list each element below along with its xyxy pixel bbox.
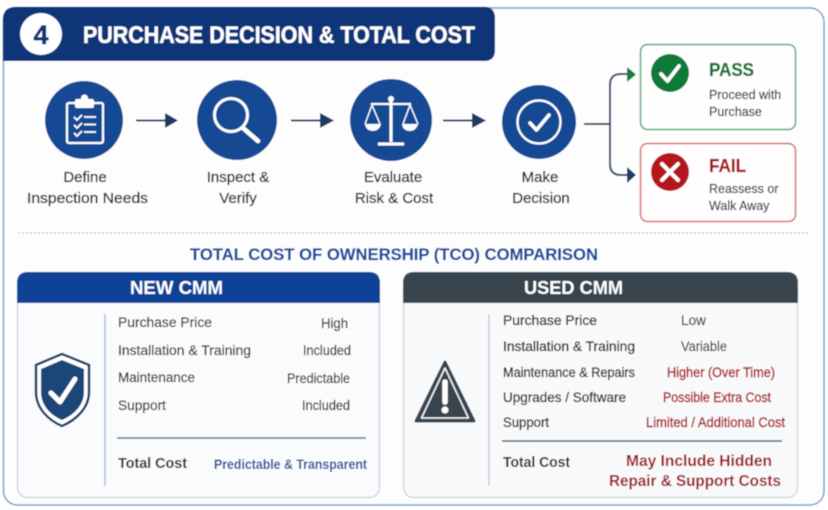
label: Risk & Cost: [355, 190, 434, 207]
icon: fail cross: [651, 153, 689, 191]
used CMM total: Total Cost: [503, 455, 570, 471]
label: Make: [522, 169, 558, 186]
panel: used CMM: [403, 272, 798, 498]
used CMM rows: Limited / Additional Cost: [646, 414, 785, 430]
new CMM rows: Installation & Training: [118, 343, 251, 358]
icon: warning triangle: [416, 362, 474, 421]
banner background: [3, 7, 495, 61]
used CMM rows: Support: [503, 414, 549, 430]
used CMM rows: [503, 312, 785, 430]
header banner: [3, 7, 495, 61]
fail text: Walk Away: [709, 199, 770, 213]
used CMM rows: Higher (Over Time): [667, 364, 775, 380]
branching arrows: [584, 67, 636, 183]
pass heading: PASS: [709, 60, 754, 80]
label: Verify: [219, 190, 257, 207]
pass text: Proceed with: [709, 88, 781, 102]
arrow: step 3 to 4: [443, 113, 486, 128]
used CMM rows: Maintenance & Repairs: [503, 364, 635, 380]
title: PURCHASE DECISION & TOTAL COST: [83, 22, 475, 49]
step 2: inspect and verify: [197, 80, 277, 207]
icon: balance scales: [350, 79, 432, 161]
fail heading: FAIL: [709, 156, 746, 176]
icon: magnifying glass: [197, 80, 277, 160]
used CMM total: [503, 453, 781, 490]
step 4: make decision: [502, 85, 576, 207]
new CMM rows: Maintenance: [118, 370, 195, 385]
used CMM rows: Variable: [681, 338, 727, 354]
label: Define: [63, 169, 107, 186]
arrow: step 2 to 3: [291, 113, 334, 128]
new CMM header: NEW CMM: [130, 278, 223, 298]
label: Evaluate: [364, 169, 422, 186]
new CMM rows: [118, 315, 351, 413]
label: Inspection Needs: [27, 190, 148, 207]
new CMM rows: Purchase Price: [118, 315, 212, 330]
new CMM rows: High: [321, 316, 348, 331]
used CMM header: USED CMM: [524, 278, 623, 298]
used CMM header: [403, 272, 798, 303]
used CMM rows: Low: [681, 312, 707, 328]
label: Decision: [512, 190, 570, 207]
new CMM total: Total Cost: [118, 456, 187, 472]
new CMM total: [118, 456, 367, 472]
fail text: Reassess or: [709, 182, 778, 196]
panel: fail: [640, 144, 796, 222]
arrow: step 1 to 2: [136, 113, 178, 128]
new CMM total: Predictable & Transparent: [214, 456, 367, 472]
new CMM rows: Support: [118, 398, 166, 413]
panel: new CMM: [17, 272, 380, 498]
step number badge: 4: [33, 20, 49, 50]
new CMM rows: Predictable: [287, 371, 350, 386]
icon: pass check: [651, 54, 689, 92]
panel: pass: [640, 44, 796, 130]
step number badge: [20, 13, 62, 55]
new CMM rows: Included: [302, 398, 350, 413]
used CMM rows: Upgrades / Software: [503, 389, 626, 405]
icon: shield check: [36, 354, 89, 426]
used CMM rows: Possible Extra Cost: [663, 389, 771, 405]
step 3: evaluate risk and cost: [350, 79, 434, 207]
label: Inspect &: [207, 169, 269, 186]
new CMM rows: Included: [303, 343, 351, 358]
used CMM total: Repair & Support Costs: [609, 473, 781, 490]
icon: clipboard checklist: [45, 81, 123, 159]
icon: check in circle: [502, 85, 576, 159]
step 1: define inspection needs: [27, 81, 148, 207]
pass text: Purchase: [709, 105, 762, 119]
used CMM rows: Installation & Training: [503, 338, 635, 354]
used CMM total: May Include Hidden: [626, 453, 772, 470]
used CMM rows: Purchase Price: [503, 312, 597, 328]
TCO heading: TOTAL COST OF OWNERSHIP (TCO) COMPARISON: [190, 246, 598, 264]
new CMM header: [17, 272, 380, 303]
